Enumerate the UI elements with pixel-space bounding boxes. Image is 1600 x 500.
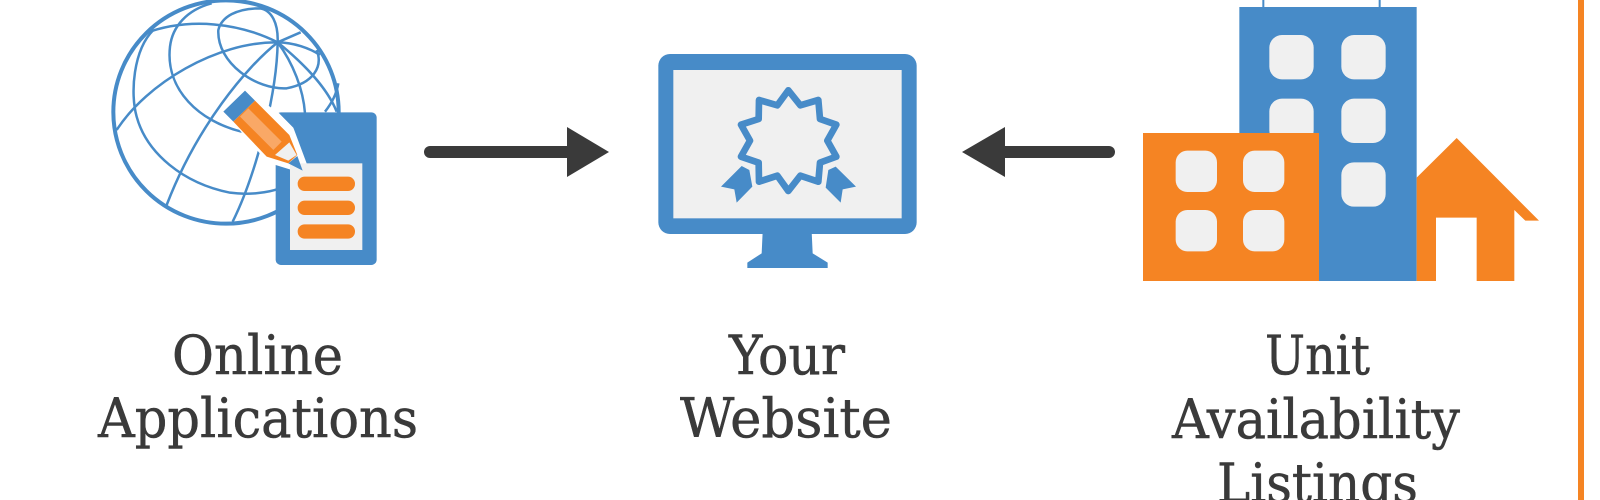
orange divider <box>1578 0 1584 500</box>
label: Online Applications: Online <box>172 324 343 387</box>
label: Unit Availability Listings: Unit <box>1265 324 1370 387</box>
label: Your Website <box>680 324 892 450</box>
orange building <box>1143 133 1319 281</box>
arrow: applications to website <box>424 127 609 177</box>
clipboard <box>276 112 377 265</box>
tower windows <box>1269 35 1386 207</box>
award badge <box>741 90 836 191</box>
label: Online Applications <box>97 324 418 450</box>
antenna <box>1262 0 1381 7</box>
label: Your Website: Your <box>728 324 845 387</box>
monitor frame <box>658 54 917 234</box>
globe <box>113 0 339 224</box>
blue tower <box>1239 7 1417 281</box>
label: Unit Availability Listings <box>1171 324 1460 500</box>
house <box>1417 138 1539 281</box>
icon: globe with application form <box>113 0 377 265</box>
label: Your Website: Website <box>680 387 892 450</box>
orange building windows <box>1176 151 1284 251</box>
arrow: listings to website <box>962 127 1115 177</box>
label: Unit Availability Listings: Availability <box>1171 388 1460 451</box>
paper <box>290 163 362 250</box>
label: Online Applications: Applications <box>97 387 418 450</box>
award ribbons <box>721 166 856 203</box>
screen <box>673 70 902 218</box>
form lines <box>298 177 355 239</box>
monitor stand <box>747 232 828 268</box>
pencil <box>223 91 303 171</box>
icon: buildings and house <box>1143 0 1539 281</box>
icon: monitor with award badge <box>658 54 917 268</box>
pencil cutout <box>237 97 307 173</box>
